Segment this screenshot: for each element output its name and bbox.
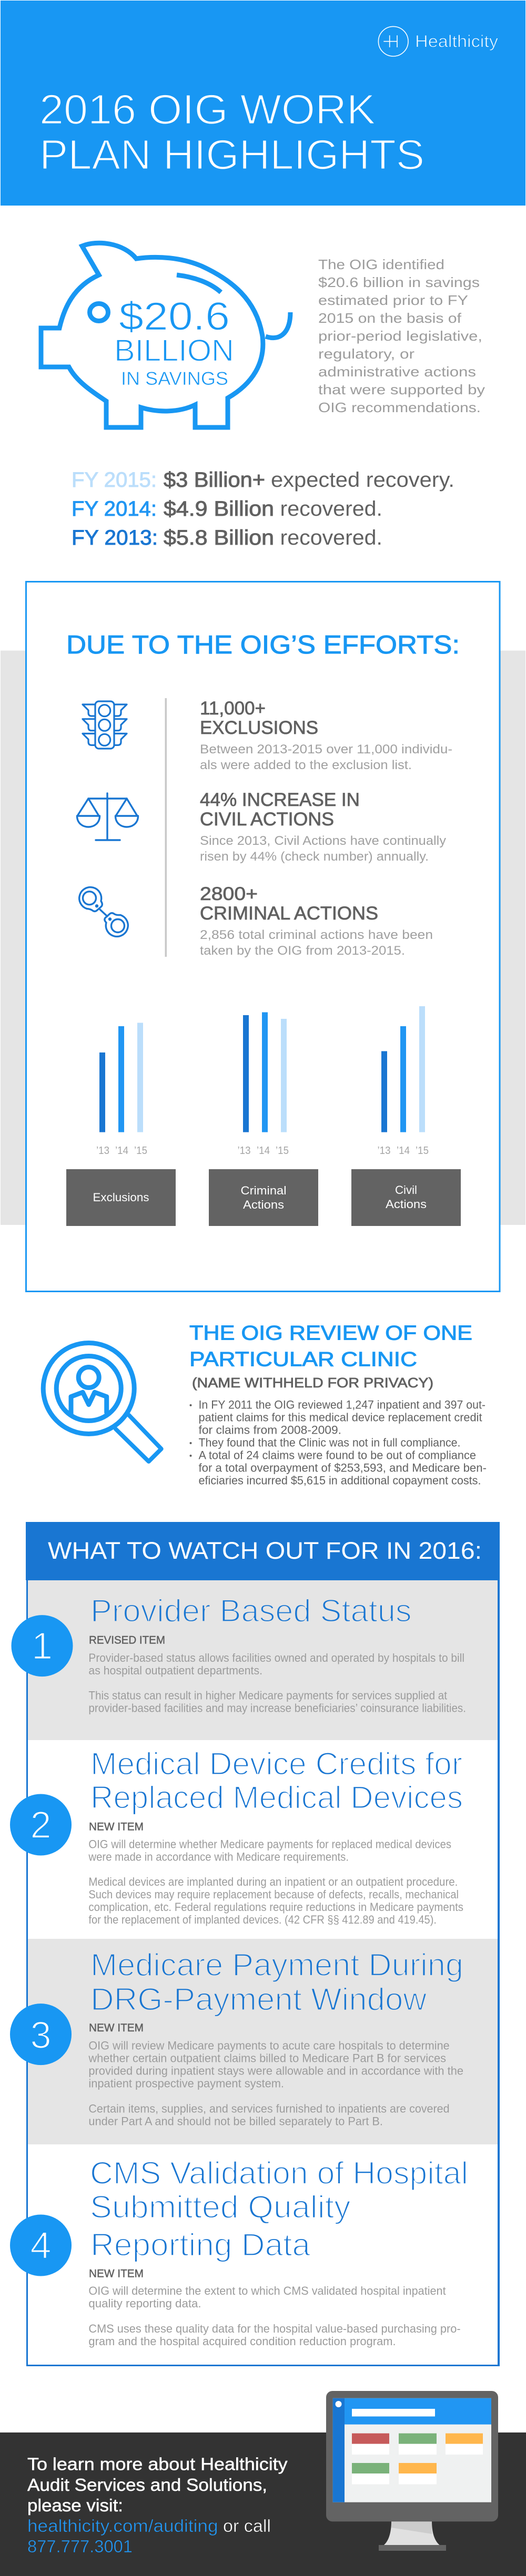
item 4: CMS validation: Submitted Quality	[90, 2189, 350, 2225]
label box: exclusions	[66, 1169, 176, 1226]
item 2: medical device credits: for the replacement of implanted devices. (42 CFR §§ 412.89 and 419.45).	[88, 1913, 437, 1926]
fiscal year recoveries: expected recovery.	[271, 468, 454, 492]
heading banner: watch out: WHAT TO WATCH OUT FOR IN 2016:	[48, 1537, 482, 1564]
fiscal year recoveries: recovered.	[280, 526, 382, 549]
panel: due to the OIG's efforts	[26, 581, 500, 1291]
fiscal year recoveries: recovered.	[280, 497, 382, 520]
item 1: provider based status	[28, 1580, 498, 1740]
label box: criminal actions: Actions	[243, 1198, 284, 1211]
title: PLAN HIGHLIGHTS	[39, 131, 424, 178]
item 1: provider based status: This status can result in higher Medicare payments for services supplied at	[88, 1689, 447, 1702]
bar chart: exclusions: ’13	[96, 1145, 109, 1157]
heading: efforts: DUE TO THE OIG’S EFFORTS:	[66, 631, 460, 659]
text: civil actions: Since 2013, Civil Actions have continually	[200, 834, 446, 848]
fiscal year recoveries: $4.9 Billion	[164, 497, 274, 520]
bar chart: criminal actions: ’13	[238, 1145, 250, 1157]
bullet list: review findings: for claims from 2008-2009.	[199, 1424, 341, 1436]
label box: criminal actions	[209, 1169, 318, 1226]
fiscal year recoveries: $5.8 Billion	[164, 526, 274, 549]
text block: savings description: OIG recommendations.	[318, 400, 481, 415]
bullet list: review findings	[189, 1398, 487, 1487]
text block: savings description: administrative actions	[318, 364, 476, 380]
item 2: medical device credits: NEW ITEM	[89, 1821, 144, 1833]
text: criminal actions: 2800+	[200, 884, 258, 904]
bullet list: review findings: eficiaries incurred $5,615 in additional copayment costs.	[199, 1474, 481, 1487]
item 1: provider based status: Provider Based Status	[90, 1593, 411, 1629]
label box: civil actions: Civil	[395, 1183, 417, 1197]
number badge 4	[10, 2214, 72, 2276]
bar chart: criminal actions: ’15	[276, 1145, 289, 1157]
item 1: provider based status: provider-based facilities and may increase beneficiaries’ coinsurance liabilities.	[88, 1702, 466, 1715]
text block: savings description: $20.6 billion in savings	[318, 274, 480, 290]
item 3: medicare payment during DRG window: under Part A and should not be billed separately to Part B.	[88, 2114, 383, 2128]
call to action text: To learn more about Healthicity	[27, 2454, 288, 2474]
call to action text	[27, 2454, 288, 2556]
title: 2016 OIG WORK	[39, 86, 376, 132]
item 4: CMS validation	[28, 2144, 498, 2365]
bar chart: exclusions: ’14	[115, 1145, 128, 1157]
heading: clinic review: THE OIG REVIEW OF ONE	[189, 1322, 472, 1345]
text: exclusions: als were added to the exclusion list.	[200, 758, 412, 772]
item 2: medical device credits: Such devices may require replacement because of defects, recalls, mechanical	[88, 1888, 459, 1901]
savings amount: BILLION	[114, 333, 234, 368]
text: exclusions: 11,000+	[200, 698, 266, 719]
bar chart: civil actions	[378, 1006, 429, 1157]
number badge 1	[12, 1615, 73, 1677]
item 1: provider based status: as hospital outpatient departments.	[88, 1664, 262, 1677]
icon: handcuffs	[79, 887, 128, 936]
bullet list: review findings: A total of 24 claims were found to be out of compliance	[199, 1449, 476, 1461]
label box: exclusions: Exclusions	[93, 1191, 149, 1204]
bar chart: criminal actions	[238, 1013, 289, 1157]
text block: savings description: estimated prior to FY	[318, 292, 468, 308]
item 2: medical device credits: complication, etc. Federal regulations require reductions in Medicare payments	[88, 1900, 463, 1914]
fiscal year recoveries	[72, 468, 454, 549]
icon: traffic light	[83, 701, 127, 749]
item 2: medical device credits: were made in accordance with Medicare requirements.	[88, 1850, 349, 1863]
item 3: medicare payment during DRG window: NEW ITEM	[89, 2022, 144, 2034]
call to action text: Audit Services and Solutions,	[27, 2475, 267, 2495]
item 2: medical device credits: Replaced Medical Devices	[90, 1780, 463, 1815]
fiscal year recoveries: FY 2013:	[72, 526, 158, 549]
text: exclusions	[200, 698, 452, 772]
heading: clinic review: PARTICULAR CLINIC	[189, 1348, 417, 1371]
item 3: medicare payment during DRG window: inpatient prospective payment system.	[88, 2077, 284, 2090]
savings amount: $20.6	[119, 294, 230, 339]
text block: savings description: prior-period legislative,	[318, 328, 482, 344]
icon: piggy bank	[41, 243, 290, 427]
bullet list: review findings: In FY 2011 the OIG reviewed 1,247 inpatient and 397 out-	[199, 1398, 485, 1412]
text: exclusions: Between 2013-2015 over 11,000 individu-	[200, 742, 452, 757]
footer	[0, 2391, 526, 2576]
item 1: provider based status: REVISED ITEM	[89, 1634, 165, 1647]
savings amount: IN SAVINGS	[121, 369, 228, 389]
item 3: medicare payment during DRG window: whether certain outpatient claims billed to Medicare Part B for services	[88, 2051, 446, 2065]
item 2: medical device credits: Medical devices are implanted during an inpatient or an outpatient procedure.	[88, 1875, 458, 1888]
item 4: CMS validation: OIG will determine the extent to which CMS validated hospital inpatient	[88, 2284, 446, 2297]
fiscal year recoveries: FY 2014:	[72, 497, 157, 520]
bar chart: civil actions: ’15	[416, 1145, 429, 1157]
title	[39, 86, 424, 178]
savings amount	[114, 294, 234, 389]
call to action text: or call	[223, 2516, 271, 2536]
item 3: medicare payment during DRG window: Certain items, supplies, and services furnished to inpatients are covered	[88, 2102, 450, 2115]
number badge 4: 4	[30, 2225, 52, 2267]
number badge 2: 2	[30, 1804, 52, 1846]
call to action text: please visit:	[27, 2496, 123, 2515]
item 3: medicare payment during DRG window: OIG will review Medicare payments to acute care hospitals to determine	[88, 2039, 450, 2052]
text block: savings description	[318, 257, 485, 415]
item 2: medical device credits: Medical Device Credits for	[90, 1746, 462, 1781]
bullet list: review findings: for a total overpayment of $253,593, and Medicare ben-	[199, 1461, 487, 1474]
logo: Healthicity	[378, 26, 498, 56]
call to action text: healthicity.com/auditing	[27, 2516, 218, 2536]
logo: Healthicity: Healthicity	[415, 32, 498, 50]
header banner	[1, 1, 525, 206]
item 3: medicare payment during DRG window: Medicare Payment During	[90, 1947, 463, 1982]
call to action text: 877.777.3001	[27, 2537, 133, 2556]
label box: criminal actions: Criminal	[241, 1184, 286, 1197]
text: criminal actions: CRIMINAL ACTIONS	[200, 903, 378, 924]
text: civil actions	[200, 790, 446, 864]
item 3: medicare payment during DRG window: DRG-Payment Window	[90, 1982, 427, 2017]
text block: savings description: The OIG identified	[318, 257, 444, 272]
panel: what to watch out for	[10, 1522, 500, 2366]
bullet list: review findings: They found that the Clinic was not in full compliance.	[199, 1436, 461, 1449]
item 4: CMS validation: gram and the hospital acquired condition reduction program.	[88, 2335, 396, 2348]
icon: desktop monitor	[326, 2391, 498, 2551]
bar chart: criminal actions: ’14	[257, 1145, 270, 1157]
item 3: medicare payment during DRG window	[28, 1939, 498, 2144]
icon: magnifier with person	[43, 1343, 161, 1461]
number badge 3: 3	[30, 2015, 52, 2057]
number badge 3	[10, 2003, 72, 2065]
text: civil actions: risen by 44% (check number) annually.	[200, 850, 429, 864]
piggy bank savings graphic	[41, 243, 290, 427]
panel: clinic review	[43, 1322, 487, 1487]
heading banner: watch out	[26, 1522, 500, 1580]
text block: savings description: regulatory, or	[318, 346, 414, 362]
fiscal year recoveries: FY 2015:	[72, 468, 157, 492]
bullet list: review findings: patient claims for this medical device replacement credit	[199, 1411, 482, 1424]
item 4: CMS validation: CMS uses these quality data for the hospital value-based purchasing pro-	[88, 2322, 461, 2335]
fiscal year recoveries: $3 Billion+	[164, 468, 265, 492]
item 2: medical device credits	[28, 1740, 498, 1939]
bar chart: civil actions: ’14	[397, 1145, 410, 1157]
icon: scales	[77, 793, 138, 840]
item 4: CMS validation: CMS Validation of Hospital	[90, 2155, 468, 2191]
label box: civil actions: Actions	[386, 1198, 427, 1211]
number badge 1: 1	[32, 1626, 53, 1668]
text: civil actions: 44% INCREASE IN	[200, 790, 360, 810]
bar chart: exclusions: ’15	[134, 1145, 147, 1157]
label box: civil actions	[351, 1169, 461, 1226]
item 4: CMS validation: quality reporting data.	[88, 2297, 201, 2310]
bar chart: civil actions: ’13	[378, 1145, 390, 1157]
text: civil actions: CIVIL ACTIONS	[200, 809, 334, 830]
text: criminal actions	[200, 884, 433, 958]
heading: clinic review	[189, 1322, 472, 1371]
text: criminal actions: 2,856 total criminal actions have been	[200, 928, 433, 942]
text block: savings description: that were supported by	[318, 382, 485, 397]
subheading: name withheld: (NAME WITHHELD FOR PRIVACY)	[192, 1375, 433, 1391]
item 1: provider based status: Provider-based status allows facilities owned and operated by hospitals to bill	[88, 1651, 464, 1664]
item 2: medical device credits: OIG will determine whether Medicare payments for replaced medical devices	[88, 1837, 451, 1851]
text: exclusions: EXCLUSIONS	[200, 718, 318, 738]
item 3: medicare payment during DRG window: provided during inpatient stays were allowable and in accordance with the	[88, 2064, 463, 2077]
item 4: CMS validation: Reporting Data	[90, 2227, 311, 2263]
bar chart: exclusions	[96, 1023, 147, 1157]
number badge 2	[10, 1794, 72, 1856]
text: criminal actions: taken by the OIG from 2013-2015.	[200, 944, 405, 958]
item 4: CMS validation: NEW ITEM	[89, 2268, 144, 2280]
text block: savings description: 2015 on the basis of	[318, 310, 462, 326]
